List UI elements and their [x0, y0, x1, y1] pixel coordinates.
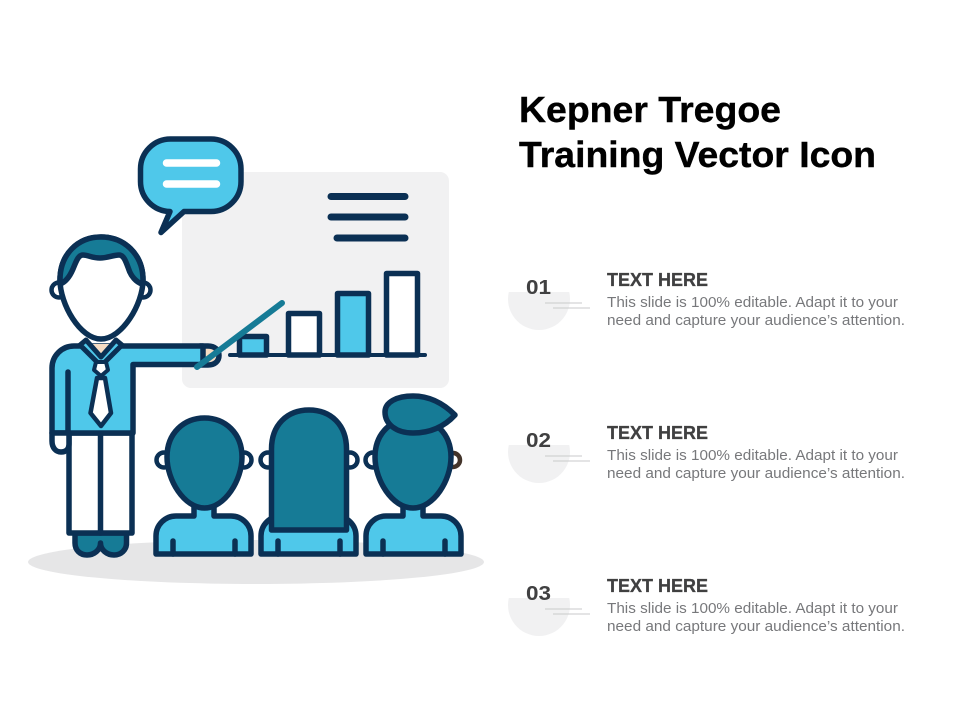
audience member 2 — [260, 410, 358, 554]
presenter hand — [200, 346, 219, 365]
presenter hair — [60, 237, 143, 284]
audience member 1 — [156, 418, 252, 554]
item 02: This slide is 100% editable. Adapt it to your — [607, 448, 898, 464]
ground shadow — [28, 540, 484, 584]
item 01: TEXT HERE — [607, 270, 708, 290]
item 03: 03 — [526, 583, 551, 605]
item 03 — [508, 576, 905, 636]
presenter ears — [52, 282, 150, 298]
presenter sleeve — [52, 372, 69, 452]
audience member 3 — [366, 396, 461, 554]
presenter head — [60, 237, 143, 339]
item 02 — [508, 423, 905, 483]
presentation board — [182, 172, 449, 388]
presenter collar and tie — [80, 340, 122, 426]
title: Training Vector Icon — [519, 134, 876, 175]
item 03: need and capture your audience’s attention. — [607, 619, 905, 635]
bar chart — [230, 274, 425, 355]
item 02: TEXT HERE — [607, 423, 708, 443]
board text lines — [331, 196, 405, 238]
item 01: This slide is 100% editable. Adapt it to your — [607, 295, 898, 311]
presenter — [52, 237, 219, 555]
speech bubble — [140, 139, 241, 232]
item 03: TEXT HERE — [607, 576, 708, 596]
item 03: This slide is 100% editable. Adapt it to your — [607, 601, 898, 617]
presenter legs — [69, 433, 132, 555]
item 02: need and capture your audience’s attention. — [607, 466, 905, 482]
item 02: 02 — [526, 430, 551, 452]
item 01: 01 — [526, 277, 551, 299]
presenter suit — [52, 346, 203, 433]
item 01 — [508, 270, 905, 330]
pointer stick — [197, 303, 282, 367]
title: Kepner Tregoe — [519, 89, 781, 130]
item 01: need and capture your audience’s attention. — [607, 313, 905, 329]
